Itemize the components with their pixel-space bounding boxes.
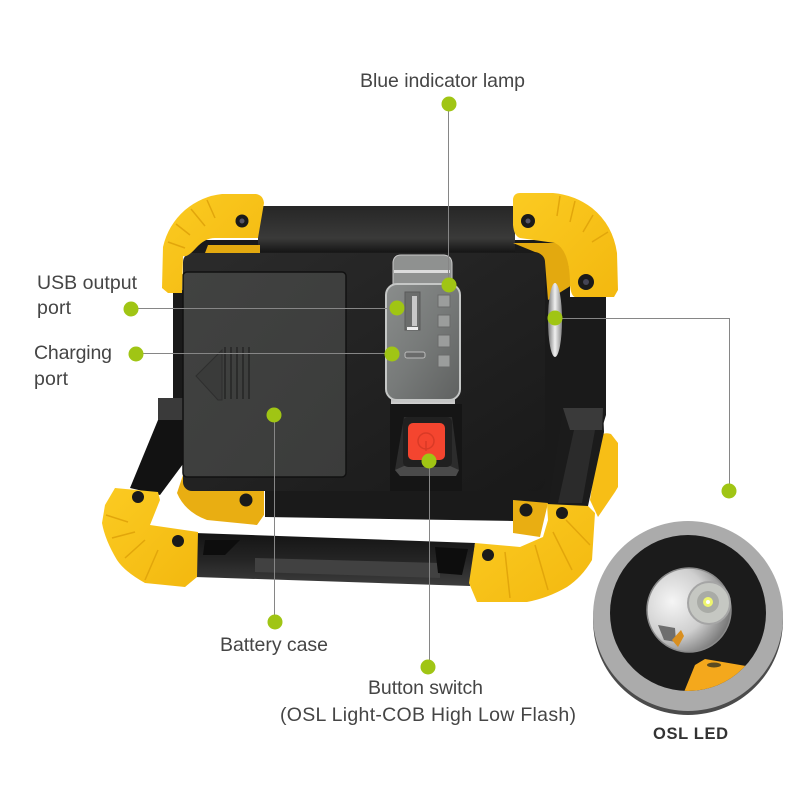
- yellow strip behind body top: [205, 243, 572, 300]
- front right yellow corner: [469, 504, 595, 602]
- label: charging port: port: [34, 368, 69, 390]
- front stand bar: [195, 533, 475, 586]
- inset lens: [647, 568, 731, 652]
- rear lower screw: [240, 494, 252, 506]
- USB port: [405, 292, 420, 330]
- side lens: [548, 283, 562, 357]
- left stand arm: [130, 398, 188, 495]
- rear housing: [173, 206, 606, 521]
- clear port cover: [386, 255, 460, 404]
- inset: OSL LED close-up: [593, 521, 783, 715]
- label: button switch: Button switch: [368, 677, 483, 699]
- leader lines: [131, 104, 730, 667]
- top left yellow corner: [162, 194, 264, 293]
- label: battery case: Battery case: [220, 634, 328, 656]
- label: USB output port: USB output: [37, 272, 138, 294]
- product: work light: [102, 193, 618, 602]
- top right yellow corner: [513, 193, 618, 297]
- rear yellow corners at bottom: [177, 433, 618, 537]
- power button: [390, 404, 462, 491]
- label: charging port: Charging: [34, 342, 112, 364]
- cover arrow and grip: [196, 347, 249, 400]
- main body: [183, 253, 545, 491]
- inset yellow bracket: [684, 659, 746, 691]
- label: blue indicator lamp: Blue indicator lamp: [360, 70, 525, 92]
- callout dots: [124, 96, 736, 674]
- rear lower right screw: [520, 504, 532, 516]
- label: OSL LED: OSL LED: [653, 725, 728, 743]
- battery cover: [183, 272, 346, 477]
- micro USB port: [405, 352, 425, 358]
- right stand arm: [548, 408, 604, 506]
- indicator lamps: [438, 295, 450, 367]
- label: button modes: (OSL Light-COB High Low Flash): [280, 704, 576, 726]
- front left yellow corner: [102, 488, 198, 587]
- label: USB output port: port: [37, 297, 72, 319]
